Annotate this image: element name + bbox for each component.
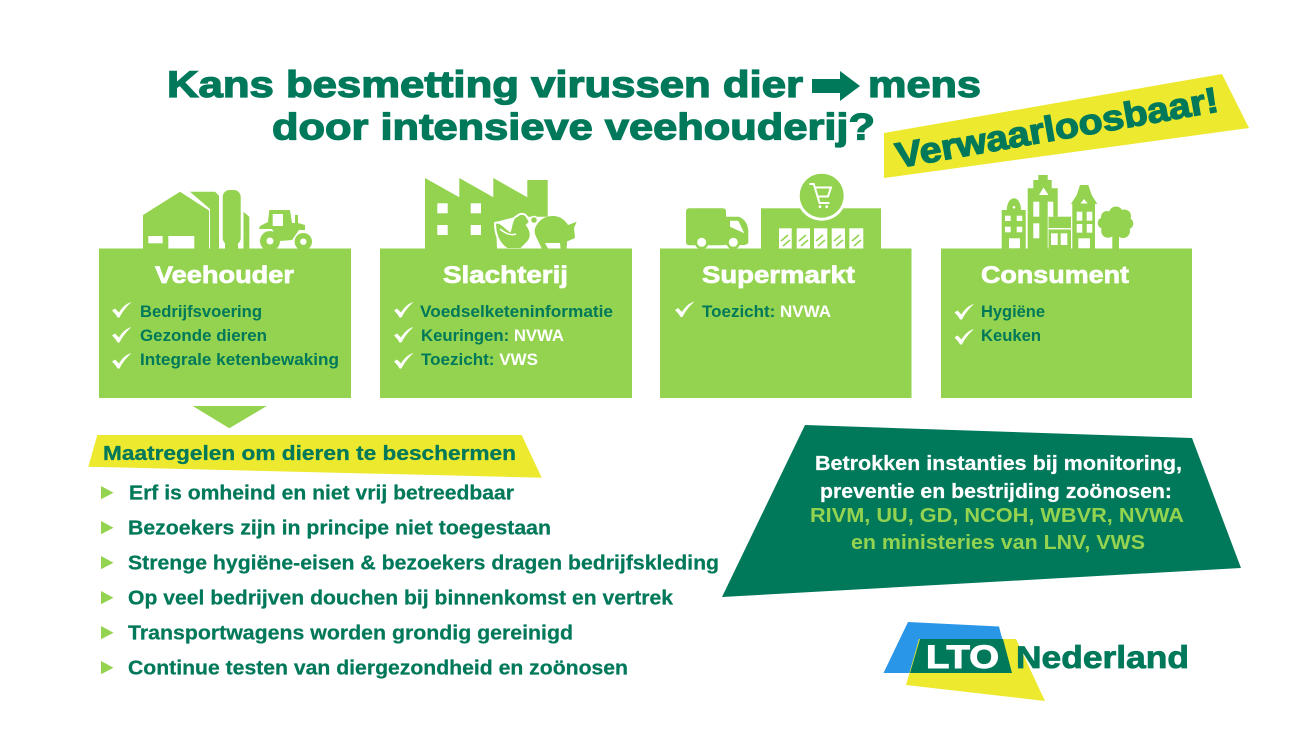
logo: LTO Nederland: Nederland — [1016, 639, 1189, 675]
list: Veehouder checks: Bedrijfsvoering — [140, 303, 262, 321]
title: Kans besmetting virussen dier — [167, 63, 803, 105]
title: mens — [868, 63, 981, 105]
banner: Maatregelen: Maatregelen om dieren te beschermen — [103, 442, 516, 465]
panel: betrokken instanties: en ministeries van LNV, VWS — [851, 532, 1145, 554]
panel: Slachterij — [380, 248, 632, 398]
icon: farm — [143, 190, 312, 251]
panel: Supermarkt — [660, 248, 912, 398]
heading: Veehouder: Veehouder — [155, 262, 294, 289]
list: Slachterij checks: Voedselketeninformatie — [420, 303, 613, 321]
panel: betrokken instanties: preventie en bestrijding zoönosen: — [820, 481, 1172, 503]
list: Slachterij checks: Toezicht: VWS — [421, 351, 538, 369]
list: maatregelen: Continue testen van diergezondheid en zoönosen — [128, 658, 628, 680]
arrow: down from Veehouder — [193, 406, 267, 428]
icon: town with tree — [1002, 175, 1133, 249]
list: maatregelen: Erf is omheind en niet vrij betreedbaar — [129, 482, 514, 504]
heading: Supermarkt: Supermarkt — [702, 262, 855, 289]
list: Consument checks — [954, 303, 1045, 345]
callout: Verwaarloosbaar: Verwaarloosbaar! — [892, 80, 1221, 176]
logo: LTO Nederland — [884, 622, 1189, 701]
list: Veehouder checks — [112, 302, 339, 369]
panel: betrokken instanties: Betrokken instanties bij monitoring, — [815, 453, 1182, 475]
panel: betrokken instanties: RIVM, UU, GD, NCOH, WBVR, NVWA — [810, 505, 1184, 527]
logo: LTO Nederland: LTO — [926, 639, 999, 675]
heading: Slachterij: Slachterij — [443, 262, 568, 289]
icon: factory with chicken and pig — [425, 178, 577, 249]
list: Veehouder checks: Gezonde dieren — [140, 327, 267, 345]
list: maatregelen: Bezoekers zijn in principe niet toegestaan — [128, 518, 551, 540]
title: door intensieve veehouderij? — [272, 106, 875, 148]
heading: Consument: Consument — [981, 262, 1129, 289]
list: Supermarkt checks: Toezicht: NVWA — [702, 303, 831, 321]
title — [167, 63, 981, 148]
list: Consument checks: Keuken — [981, 327, 1041, 345]
list: Consument checks: Hygiëne — [981, 303, 1045, 321]
panel: Consument — [941, 248, 1192, 398]
panel: Veehouder — [99, 248, 351, 398]
list: Slachterij checks: Keuringen: NVWA — [421, 327, 564, 345]
panel: betrokken instanties — [722, 425, 1241, 597]
list: maatregelen: Strenge hygiëne-eisen & bezoekers dragen bedrijfskleding — [128, 552, 719, 574]
list: Slachterij checks — [394, 302, 613, 369]
list: maatregelen: Op veel bedrijven douchen bij binnenkomst en vertrek — [128, 588, 674, 610]
list: maatregelen — [101, 482, 719, 680]
icon: truck and supermarket — [686, 171, 881, 249]
list: maatregelen: Transportwagens worden grondig gereinigd — [128, 622, 573, 644]
banner: Maatregelen — [88, 435, 542, 478]
list: Veehouder checks: Integrale ketenbewaking — [140, 351, 339, 369]
